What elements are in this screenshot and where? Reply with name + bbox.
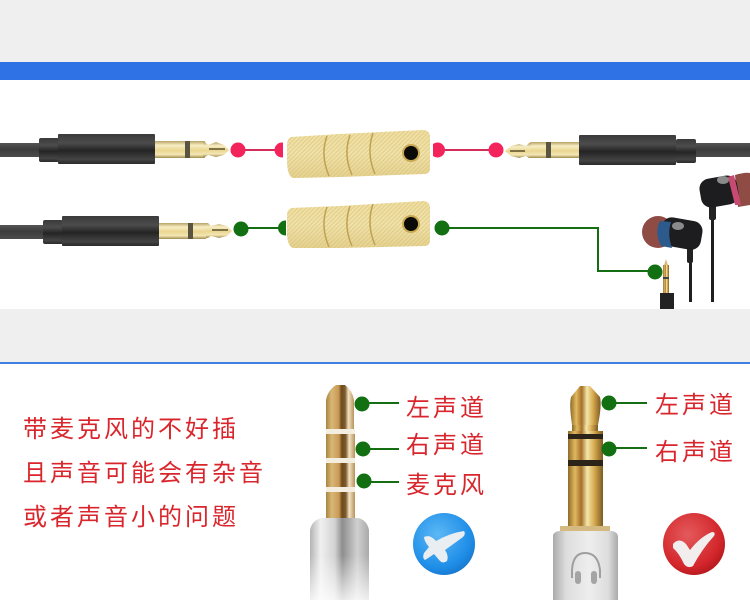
- label: left channel: 左声道: [655, 392, 736, 419]
- label: right channel: 右声道: [406, 432, 487, 459]
- red connector right: [433, 142, 504, 158]
- blue header bar: [0, 62, 750, 80]
- left plug, top row: [0, 134, 229, 164]
- icon: blue cross: [413, 513, 475, 575]
- labels for three-pole plug: [602, 392, 736, 466]
- top gray band: [0, 0, 750, 62]
- green connector to earphones: [434, 220, 662, 280]
- left plug, bottom row: [0, 216, 232, 246]
- blue divider line: [0, 362, 750, 364]
- right plug, top row: [505, 135, 750, 165]
- label: right channel: 右声道: [655, 439, 736, 466]
- red connector left: [230, 142, 290, 158]
- warning text: 且声音可能会有杂音: [23, 460, 266, 487]
- green connector left: [234, 220, 293, 236]
- three-pole plug illustration: [553, 386, 618, 600]
- warning text: [23, 416, 266, 531]
- adapter, bottom row: [286, 200, 430, 250]
- middle gray band: [0, 309, 750, 362]
- icon: headphones on plug: [572, 553, 600, 584]
- warning text: 或者声音小的问题: [23, 504, 239, 531]
- icon: red check: [663, 513, 725, 575]
- warning text: 带麦克风的不好插: [23, 416, 239, 443]
- label: microphone: 麦克风: [406, 472, 487, 499]
- earphones with mini plug: [642, 173, 750, 309]
- adapter, top row: [283, 130, 430, 180]
- four-pole plug illustration: [310, 385, 369, 600]
- label: left channel: 左声道: [406, 395, 487, 422]
- labels for four-pole plug: [354, 395, 487, 499]
